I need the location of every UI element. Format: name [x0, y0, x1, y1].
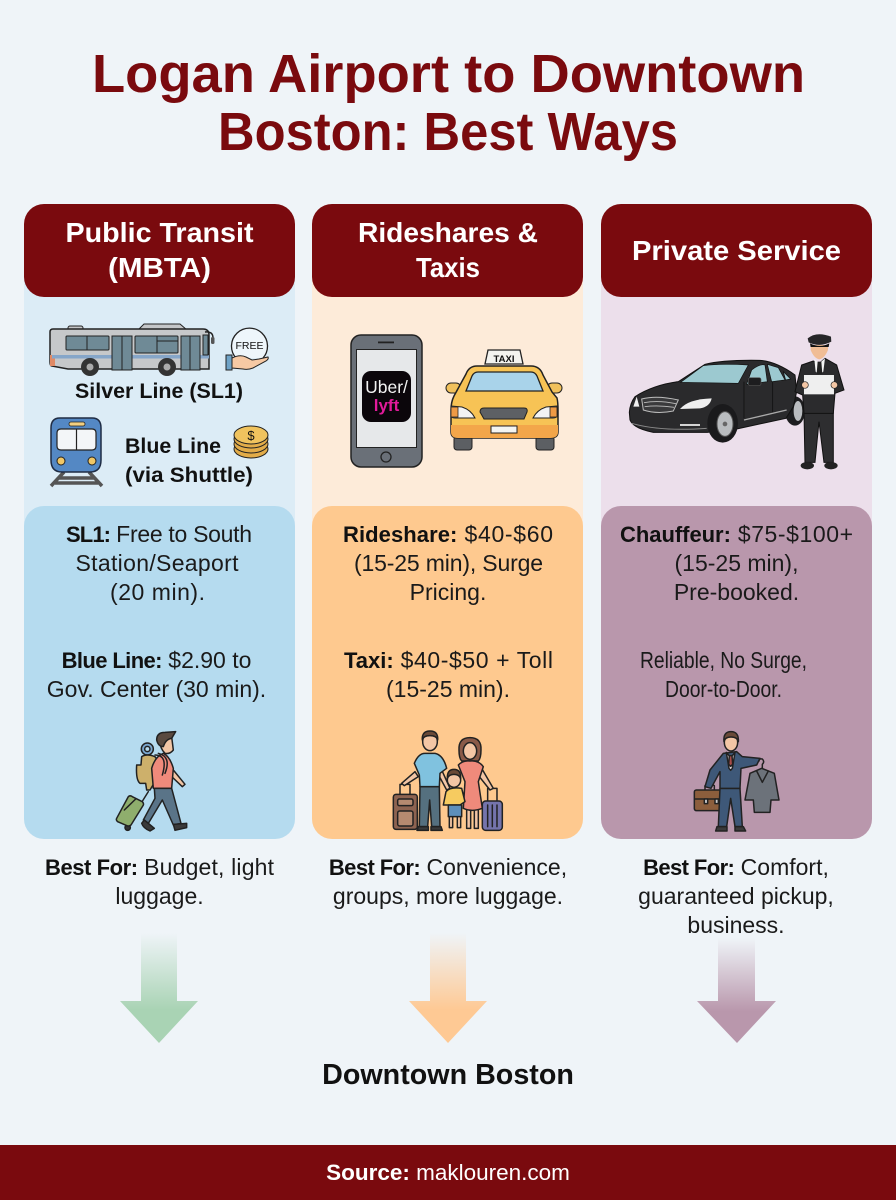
best for: public transit: luggage. — [115, 883, 204, 909]
best for: rideshares and taxis: Best For: Convenience, — [329, 854, 567, 880]
best for: private service: Best For: Comfort, — [643, 854, 829, 880]
icon: coin stack: $ — [247, 428, 255, 443]
panel: public transit details: SL1: Free to South — [66, 521, 252, 547]
footer source bar — [0, 1145, 896, 1200]
arrow: private service to downtown — [697, 938, 776, 1043]
icon: free hand: FREE — [235, 340, 264, 352]
panel: public transit details: (20 min). — [110, 579, 205, 605]
panel: private service details — [601, 506, 872, 839]
icon: coin stack — [234, 426, 268, 458]
panel: private service details: Pre-booked. — [674, 579, 799, 605]
icon: phone with ride apps: lyft — [374, 396, 400, 415]
title: Boston: Best Ways — [218, 102, 678, 162]
panel: rideshares details: (15-25 min). — [386, 676, 510, 702]
panel: public transit details: Blue Line: $2.90 to — [62, 647, 251, 673]
panel: public transit details: Gov. Center (30 min). — [47, 676, 266, 702]
panel: rideshares details: Pricing. — [410, 579, 486, 605]
icon: family with luggage — [393, 731, 502, 830]
heading: private service — [601, 204, 872, 297]
arrow: rideshares to downtown — [409, 933, 487, 1043]
panel: private service details: Chauffeur: $75-$100+ — [620, 521, 853, 547]
panel: rideshares details: Taxi: $40-$50 + Toll — [344, 647, 553, 673]
heading: public transit: Public Transit — [66, 217, 254, 248]
best for: public transit — [45, 854, 275, 909]
icon: phone with ride apps: Uber/ — [365, 377, 408, 397]
heading: public transit: (MBTA) — [108, 252, 211, 283]
footer source bar: Source: maklouren.com — [326, 1160, 570, 1185]
panel: public transit — [24, 204, 295, 839]
icon: free hand — [226, 328, 268, 370]
best for: rideshares and taxis — [329, 854, 567, 909]
title: Logan Airport to Downtown — [92, 44, 805, 104]
label: blue line: Blue Line — [125, 434, 221, 458]
heading: rideshares and taxis: Rideshares & — [358, 217, 538, 248]
panel: private service — [601, 204, 872, 839]
panel: private service details: Door-to-Door. — [665, 676, 782, 702]
icon: blue line train — [51, 418, 102, 486]
panel: private service details: (15-25 min), — [675, 550, 798, 576]
best for: public transit: Best For: Budget, light — [45, 854, 275, 880]
icon: black sedan — [629, 360, 805, 443]
icon: taxi — [446, 350, 562, 450]
best for: private service: business. — [687, 912, 785, 938]
best for: rideshares and taxis: groups, more luggage. — [333, 883, 563, 909]
panel: rideshares details: Rideshare: $40-$60 — [343, 521, 553, 547]
panel: public transit details — [24, 506, 295, 839]
label: silver line: Silver Line (SL1) — [75, 379, 243, 403]
icon: taxi: TAXI — [494, 354, 514, 365]
title — [92, 44, 805, 162]
panel: rideshares and taxis — [312, 204, 583, 839]
destination label: Downtown Boston — [322, 1059, 574, 1091]
label: blue line: (via Shuttle) — [125, 463, 253, 487]
panel: rideshares details: (15-25 min), Surge — [354, 550, 543, 576]
icon: phone with ride apps — [351, 335, 422, 467]
icon: chauffeur — [795, 334, 844, 469]
heading: rideshares and taxis: Taxis — [416, 252, 480, 283]
heading: private service: Private Service — [632, 235, 841, 266]
panel: rideshares details — [312, 506, 583, 839]
icon: backpacker with rolling bag — [116, 732, 187, 831]
best for: private service — [638, 854, 834, 938]
label: blue line — [125, 434, 253, 487]
panel: public transit details: Station/Seaport — [76, 550, 239, 576]
icon: silver line bus — [50, 324, 214, 376]
heading: public transit — [24, 204, 295, 297]
heading: rideshares and taxis — [312, 204, 583, 297]
best for: private service: guaranteed pickup, — [638, 883, 834, 909]
icon: business traveller with suit bag — [694, 732, 779, 831]
panel: private service details: Reliable, No Surge, — [640, 647, 807, 673]
arrow: public transit to downtown — [120, 933, 198, 1043]
